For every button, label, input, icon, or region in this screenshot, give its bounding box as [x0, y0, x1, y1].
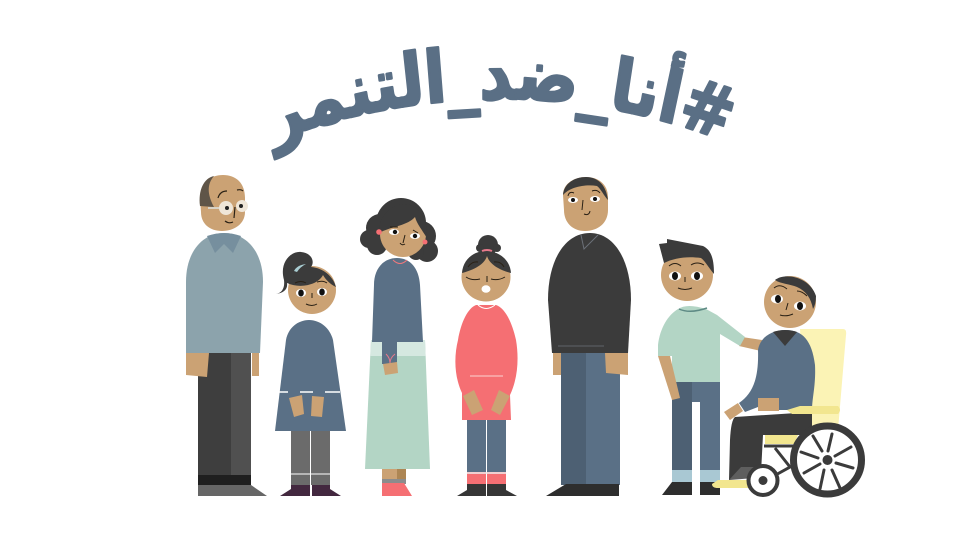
trousers: [561, 353, 620, 485]
armrest: [787, 406, 840, 414]
arm on shoulder: [739, 337, 762, 351]
hands: [553, 353, 561, 375]
head: [200, 175, 245, 231]
head: [380, 211, 426, 257]
feet: [382, 469, 406, 480]
figure: woman in mint skirt: [360, 198, 438, 496]
trousers: [729, 412, 812, 480]
footrest: [712, 480, 750, 488]
hands: [186, 353, 209, 377]
hair: [462, 251, 511, 273]
face: [771, 294, 783, 304]
figure: man in black sweater: [546, 177, 631, 496]
glasses and face: [219, 201, 233, 215]
collar: [207, 233, 241, 253]
collar: [679, 308, 707, 311]
head: [462, 252, 510, 302]
legs: [467, 420, 486, 484]
chair back: [800, 329, 846, 430]
earrings: [376, 229, 382, 235]
bodice: [372, 258, 423, 342]
figure: girl in blue dress: [275, 252, 346, 496]
hair: [276, 252, 336, 294]
head: [661, 249, 713, 301]
body: grey sweater: [186, 233, 263, 353]
head: [563, 177, 608, 231]
shoes: [457, 484, 486, 496]
large wheel: [794, 426, 862, 494]
face: [669, 272, 681, 280]
title: #أنا_ضد_التنمر: [271, 46, 734, 161]
hands: [289, 395, 304, 417]
shoes: [546, 484, 619, 496]
shoes: [198, 485, 267, 496]
left arm: [658, 356, 680, 400]
back hair: [360, 198, 438, 262]
dress: [275, 320, 346, 431]
seat: [765, 435, 798, 444]
shoes: [280, 485, 310, 496]
trousers: [672, 382, 720, 470]
sweater: [739, 330, 815, 412]
shoes: [662, 482, 692, 495]
face: [466, 262, 505, 282]
figure: boy in mint shirt: [658, 239, 762, 495]
face: [296, 289, 306, 297]
collar: [478, 305, 495, 308]
figure: girl in pink dress: [455, 235, 518, 496]
head: [288, 266, 336, 314]
hands: [758, 398, 779, 411]
cuffs: [672, 470, 720, 482]
body: [548, 233, 631, 353]
head: [764, 276, 816, 328]
hands: [463, 390, 483, 415]
dress: [455, 305, 518, 420]
hair bun: [478, 235, 498, 255]
shirt: [658, 306, 745, 382]
necklace: [393, 260, 407, 264]
hair: [659, 239, 714, 274]
fringe: [379, 204, 427, 238]
figure: grandfather: [186, 175, 267, 496]
legs: [291, 431, 310, 485]
skirt: [365, 340, 430, 469]
face: [389, 229, 399, 235]
face: [568, 197, 578, 203]
arm and hand: [382, 340, 397, 364]
leg gap: [692, 402, 700, 495]
hair: [775, 276, 816, 309]
wheelchair frame: [764, 446, 798, 477]
hair: [563, 177, 608, 200]
trousers: [198, 353, 251, 476]
small wheel: [748, 466, 778, 495]
figure: wheelchair user: [712, 276, 862, 495]
